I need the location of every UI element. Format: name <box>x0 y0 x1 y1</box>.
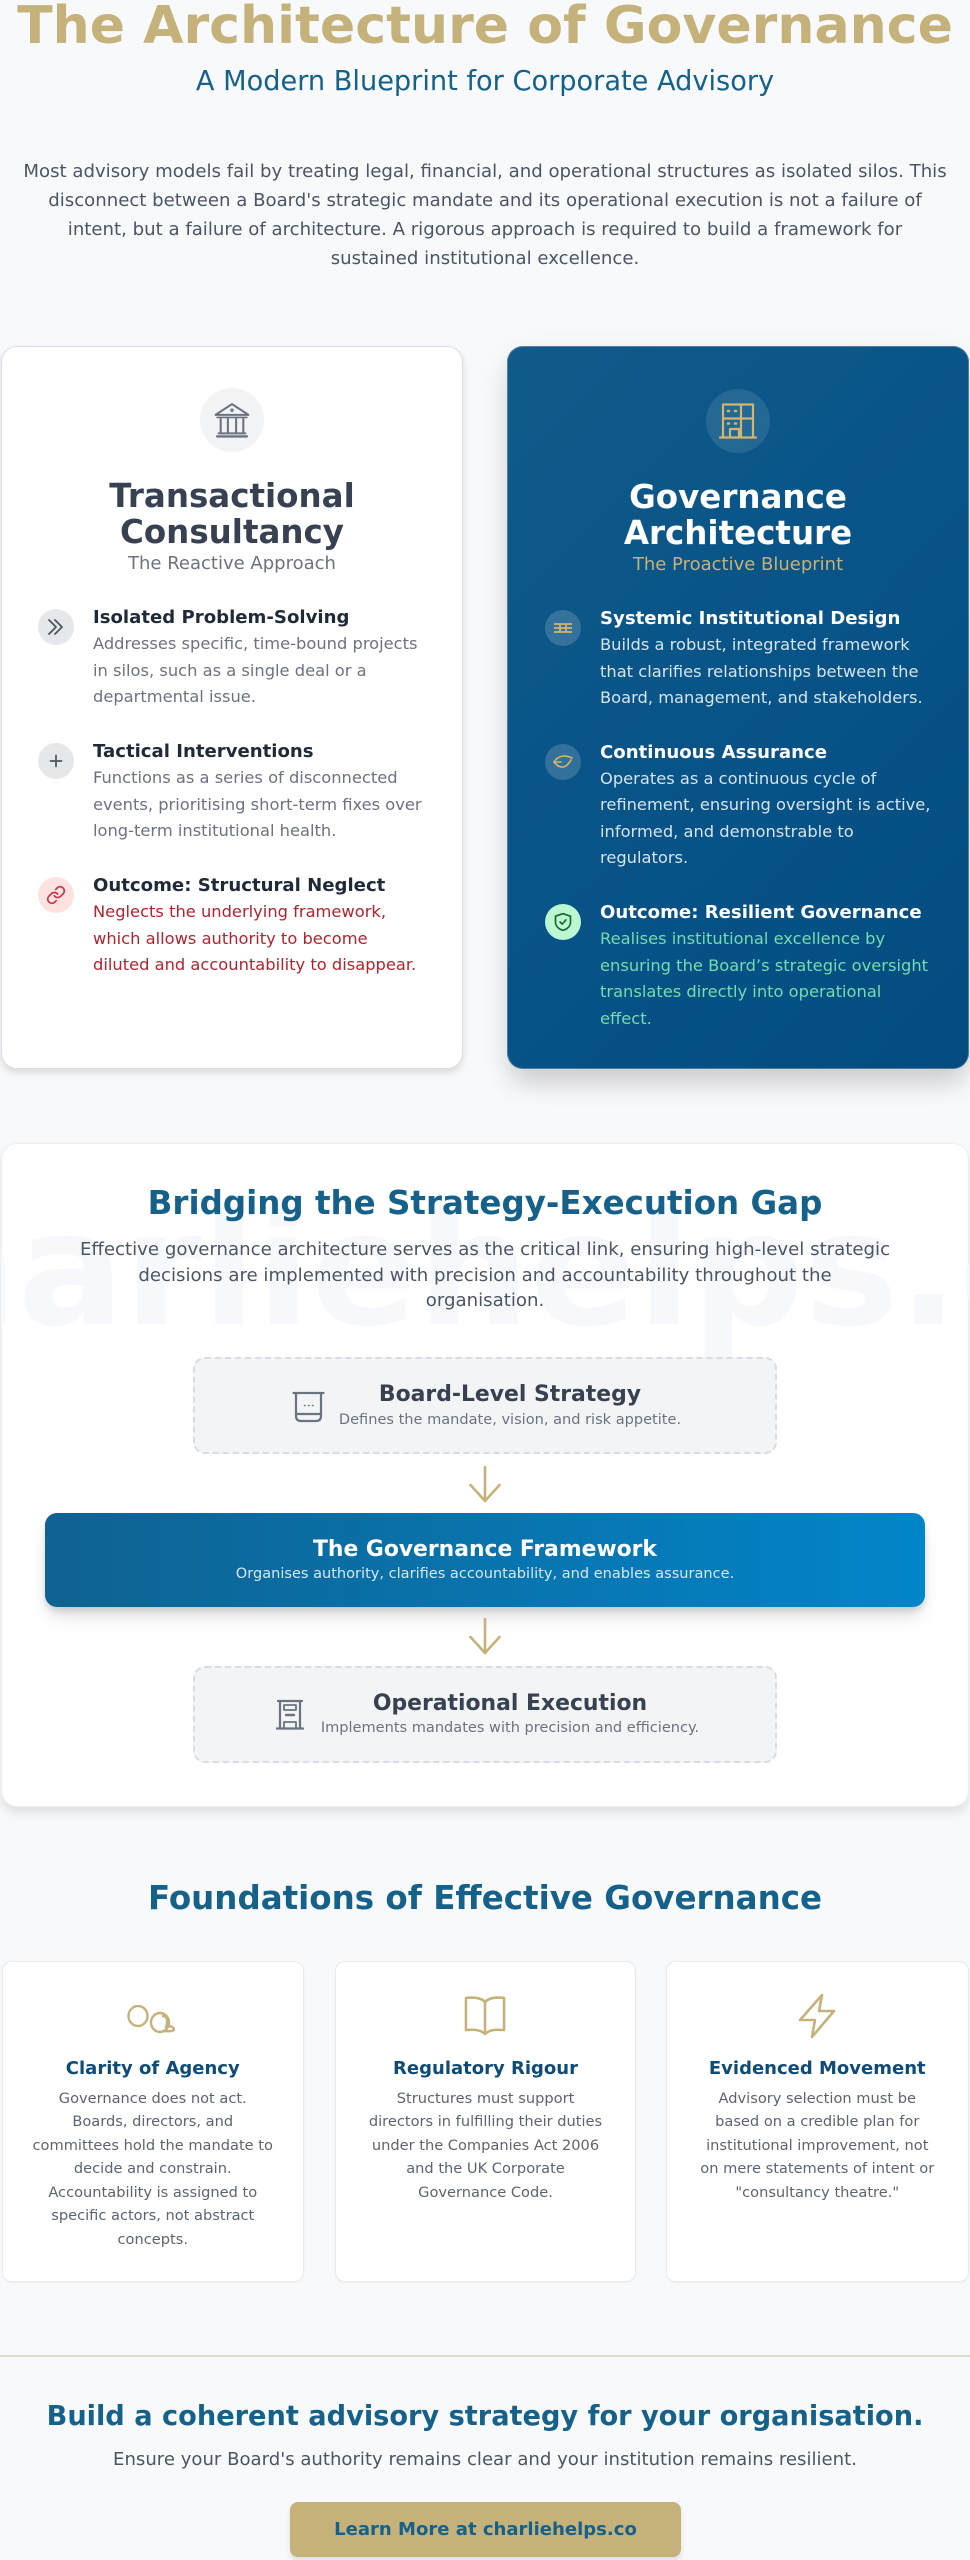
heading: Transactional <box>109 477 355 515</box>
item: resilient governance: translates directly into operational <box>600 982 881 1001</box>
icon: shield check <box>545 904 581 940</box>
icon: double chevron <box>38 609 74 645</box>
item: continuous assurance: refinement, ensuring oversight is active, <box>600 795 930 814</box>
icon: office building <box>706 389 770 453</box>
heading: Governance <box>629 478 847 516</box>
icon: structure lines <box>545 610 581 646</box>
card: clarity of agency: specific actors, not abstract <box>51 2207 254 2224</box>
item: tactical interventions <box>38 741 422 840</box>
arrow <box>469 1618 501 1654</box>
item: systemic institutional design <box>545 608 923 707</box>
card: regulatory rigour: directors in fulfilling their duties <box>369 2113 602 2130</box>
heading: Bridging the Strategy-Execution Gap <box>148 1184 822 1222</box>
icon: cycle arrows <box>545 744 581 780</box>
intro paragraph: intent, but a failure of architecture. A rigorous approach is required to build a framework for <box>68 219 902 240</box>
card: clarity of agency: committees hold the mandate to <box>33 2137 273 2154</box>
intro paragraph: Most advisory models fail by treating legal, financial, and operational structures as isolated silos. This <box>23 160 947 182</box>
card: evidenced movement: Advisory selection must be <box>719 2090 916 2106</box>
item: resilient governance: effect. <box>600 1009 652 1028</box>
subheading: The Proactive Blueprint <box>633 554 843 575</box>
heading <box>109 477 355 551</box>
card: evidenced movement: on mere statements of intent or <box>700 2160 934 2177</box>
description: decisions are implemented with precision and accountability throughout the <box>138 1265 832 1286</box>
box: governance framework: Organises authority, clarifies accountability, and enables assurance. <box>236 1565 734 1582</box>
subtitle: A Modern Blueprint for Corporate Advisory <box>196 66 774 97</box>
description <box>80 1239 890 1311</box>
card: evidenced movement: institutional improvement, not <box>706 2137 928 2154</box>
card: clarity of agency: Accountability is assigned to <box>48 2184 257 2201</box>
item: structural neglect <box>38 875 416 974</box>
button: Learn More at charliehelps.co <box>334 2519 637 2540</box>
card: regulatory rigour: and the UK Corporate <box>406 2160 565 2177</box>
item: systemic institutional design: Systemic Institutional Design <box>600 608 900 629</box>
card: evidenced movement: Evidenced Movement <box>709 2058 926 2079</box>
card: evidenced movement: "consultancy theatre." <box>735 2184 899 2201</box>
heading: foundations: Foundations of Effective Governance <box>148 1879 822 1917</box>
call to action heading: Build a coherent advisory strategy for your organisation. <box>47 2401 923 2432</box>
box: operational execution: Operational Execution <box>373 1690 647 1716</box>
heading <box>624 478 852 552</box>
icon: execution tower <box>276 1700 304 1730</box>
box: operational execution: Implements mandates with precision and efficiency. <box>321 1719 699 1736</box>
item: structural neglect: diluted and accountability to disappear. <box>93 955 416 974</box>
item: isolated problem-solving: Isolated Problem-Solving <box>93 607 349 628</box>
icon: document tray <box>292 1392 324 1422</box>
icon: agency circles <box>127 2005 176 2034</box>
card: clarity of agency <box>2 1960 304 2282</box>
description: organisation. <box>426 1290 544 1311</box>
card: clarity of agency: concepts. <box>118 2231 188 2248</box>
item: continuous assurance: Continuous Assurance <box>600 742 827 762</box>
box: operational execution <box>193 1666 777 1763</box>
item: tactical interventions: Functions as a series of disconnected <box>93 768 398 787</box>
call to action text: Ensure your Board's authority remains clear and your institution remains resilient. <box>113 2449 857 2470</box>
card: regulatory rigour: Structures must support <box>397 2090 574 2106</box>
item: isolated problem-solving <box>38 607 417 706</box>
icon: bank building <box>200 388 264 452</box>
item: isolated problem-solving: departmental issue. <box>93 687 256 706</box>
item: continuous assurance: Operates as a continuous cycle of <box>600 769 876 788</box>
card: clarity of agency: Clarity of Agency <box>66 2058 240 2079</box>
item: tactical interventions: long-term institutional health. <box>93 821 336 840</box>
item: continuous assurance: informed, and demonstrable to <box>600 822 854 841</box>
item: systemic institutional design: Builds a robust, integrated framework <box>600 635 910 654</box>
item: systemic institutional design: Board, management, and stakeholders. <box>600 688 923 707</box>
intro paragraph: sustained institutional excellence. <box>331 248 639 269</box>
card: evidenced movement <box>666 1960 968 2282</box>
button <box>290 2502 681 2557</box>
icon: link <box>38 877 74 913</box>
arrow <box>469 1466 501 1502</box>
box: board-level strategy <box>193 1357 777 1454</box>
intro paragraph: disconnect between a Board's strategic mandate and its operational execution is not a failure of <box>48 190 922 211</box>
item: tactical interventions: Tactical Interventions <box>93 741 314 762</box>
card: regulatory rigour <box>335 1960 636 2282</box>
item: structural neglect: Outcome: Structural Neglect <box>93 875 385 896</box>
icon: plus <box>38 743 74 779</box>
item: isolated problem-solving: in silos, such as a single deal or a <box>93 661 367 680</box>
item: resilient governance: ensuring the Board’s strategic oversight <box>600 956 928 975</box>
item: structural neglect: Neglects the underlying framework, <box>93 902 386 921</box>
item: isolated problem-solving: Addresses specific, time-bound projects <box>93 634 417 653</box>
intro paragraph <box>23 160 947 269</box>
item: continuous assurance <box>545 742 930 867</box>
item: tactical interventions: events, prioritising short-term fixes over <box>93 795 422 814</box>
item: systemic institutional design: that clarifies relationships between the <box>600 662 918 681</box>
heading: Architecture <box>624 514 852 552</box>
item: continuous assurance: regulators. <box>600 848 688 867</box>
box: board-level strategy: Board-Level Strategy <box>379 1382 641 1406</box>
box: governance framework: The Governance Framework <box>313 1536 657 1562</box>
icon: open book <box>464 1996 506 2036</box>
item: resilient governance: Outcome: Resilient Governance <box>600 902 922 923</box>
box: governance framework <box>45 1513 925 1607</box>
card: regulatory rigour: Governance Code. <box>418 2184 553 2201</box>
subheading: The Reactive Approach <box>128 553 336 574</box>
card: regulatory rigour: under the Companies Act 2006 <box>372 2137 599 2154</box>
card: clarity of agency: Governance does not act. <box>59 2090 247 2106</box>
description: Effective governance architecture serves as the critical link, ensuring high-level strategic <box>80 1239 890 1260</box>
item: resilient governance: Realises institutional excellence by <box>600 929 885 948</box>
heading: Consultancy <box>120 513 344 551</box>
card: clarity of agency: decide and constrain. <box>74 2160 232 2177</box>
item: resilient governance <box>545 902 928 1028</box>
card: regulatory rigour: Regulatory Rigour <box>393 2058 578 2079</box>
panel: strategy-execution gap <box>1 1143 969 1807</box>
item: structural neglect: which allows authority to become <box>93 929 368 948</box>
panel: transactional consultancy <box>1 346 463 1069</box>
card: clarity of agency: Boards, directors, and <box>72 2113 233 2130</box>
box: board-level strategy: Defines the mandate, vision, and risk appetite. <box>339 1410 681 1428</box>
icon: lightning bolt <box>798 1994 836 2038</box>
panel: governance architecture <box>507 346 969 1069</box>
card: evidenced movement: based on a credible plan for <box>715 2113 919 2130</box>
